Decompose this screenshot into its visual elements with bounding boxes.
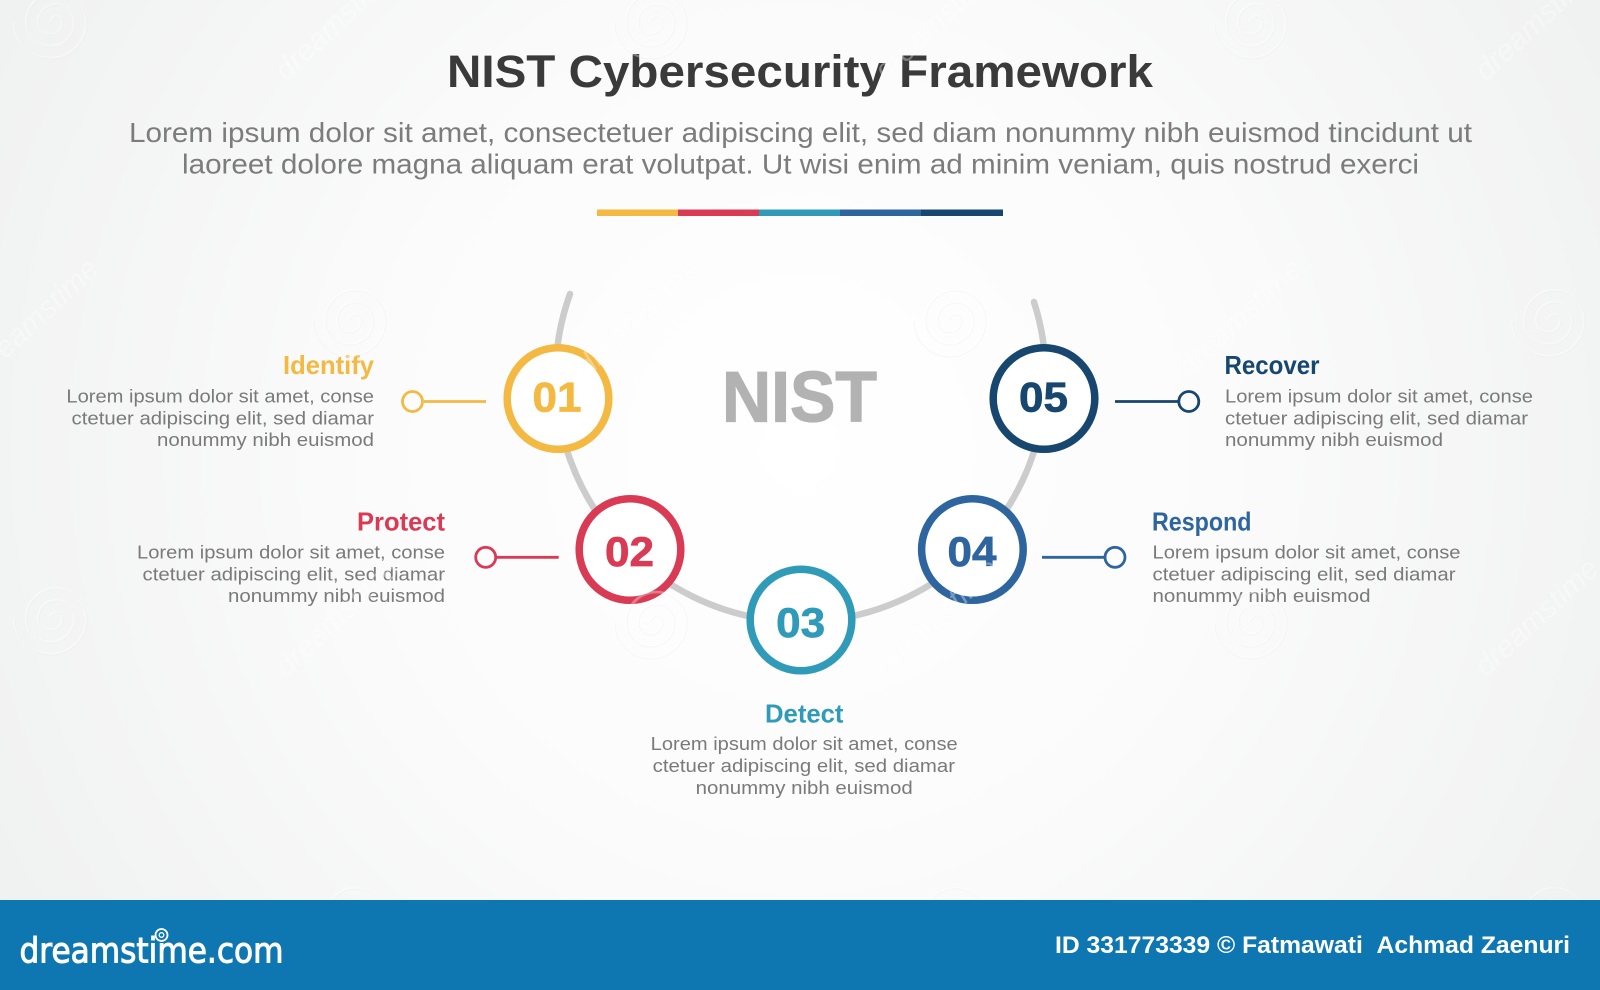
centre label NIST: NIST: [722, 358, 877, 438]
text Respond: Respond: [1152, 507, 1252, 537]
connector 01: [402, 392, 486, 412]
text Identify: [66, 350, 375, 450]
text Respond: [1152, 507, 1460, 606]
connector 04: [1042, 547, 1125, 567]
connector 05: [1115, 392, 1199, 412]
step 04 Respond: [922, 499, 1460, 606]
step 03 Detect: [651, 569, 958, 798]
semicircular track: [556, 294, 1046, 622]
text Respond: nonummy nibh euismod: [1152, 585, 1370, 606]
text Identify: nonummy nibh euismod: [157, 429, 374, 450]
number ring 02: 02: [605, 528, 654, 575]
title: NIST Cybersecurity Framework: [447, 46, 1154, 97]
number ring 03: [750, 569, 852, 671]
number ring 03: 03: [776, 599, 825, 646]
text Protect: nonummy nibh euismod: [228, 585, 445, 606]
text Respond: Lorem ipsum dolor sit amet, conse: [1152, 542, 1460, 562]
text Protect: [137, 507, 445, 606]
subtitle: Lorem ipsum dolor sit amet, consectetuer adipiscing elit, sed diam nonummy nibh euismod tincidunt ut: [129, 117, 1472, 148]
footer logo: dreamstime.com: [20, 932, 284, 972]
text Detect: Lorem ipsum dolor sit amet, conse: [651, 733, 958, 754]
step 01 Identify: [66, 348, 609, 450]
text Protect: Lorem ipsum dolor sit amet, conse: [137, 542, 445, 562]
step 02 Protect: [137, 499, 681, 606]
text Recover: [1224, 350, 1533, 450]
text Identify: ctetuer adipiscing elit, sed diamar: [72, 408, 374, 428]
number ring 04: 04: [948, 528, 997, 575]
text Recover: ctetuer adipiscing elit, sed diamar: [1225, 408, 1528, 428]
watermark overlay: dreamstime: [1171, 252, 1308, 383]
text Protect: ctetuer adipiscing elit, sed diamar: [142, 563, 445, 584]
number ring 01: [507, 348, 609, 449]
subtitle: [129, 117, 1472, 180]
text Respond: ctetuer adipiscing elit, sed diamar: [1152, 563, 1456, 584]
connector 02: [476, 547, 559, 567]
text Detect: [651, 699, 958, 798]
text Recover: nonummy nibh euismod: [1225, 429, 1443, 450]
watermark overlay: dreamstime: [868, 552, 1005, 683]
text Recover: Lorem ipsum dolor sit amet, conse: [1225, 386, 1533, 407]
colour divider bar: [597, 210, 1003, 216]
watermark overlay: dreamstime: [569, 252, 706, 383]
number ring 05: [993, 348, 1095, 449]
number ring 01: 01: [532, 374, 582, 421]
text Identify: Lorem ipsum dolor sit amet, conse: [66, 386, 374, 407]
number ring 02: [579, 499, 681, 600]
text Detect: ctetuer adipiscing elit, sed diamar: [653, 755, 955, 776]
text Detect: Detect: [765, 699, 844, 729]
text Recover: Recover: [1224, 350, 1320, 380]
watermark overlay: dreamstime: [268, 552, 405, 683]
footer credit: ID 331773339 © Fatmawati Achmad Zaenuri: [1055, 932, 1570, 959]
text Detect: nonummy nibh euismod: [696, 777, 913, 798]
text Identify: Identify: [283, 350, 375, 380]
text Protect: Protect: [357, 507, 445, 537]
subtitle: laoreet dolore magna aliquam erat volutpat. Ut wisi enim ad minim veniam, quis nostrud exerci: [182, 148, 1419, 180]
number ring 05: 05: [1019, 374, 1068, 421]
number ring 04: [922, 499, 1023, 600]
footer bar: [0, 900, 1600, 990]
step 05 Recover: [993, 348, 1533, 450]
